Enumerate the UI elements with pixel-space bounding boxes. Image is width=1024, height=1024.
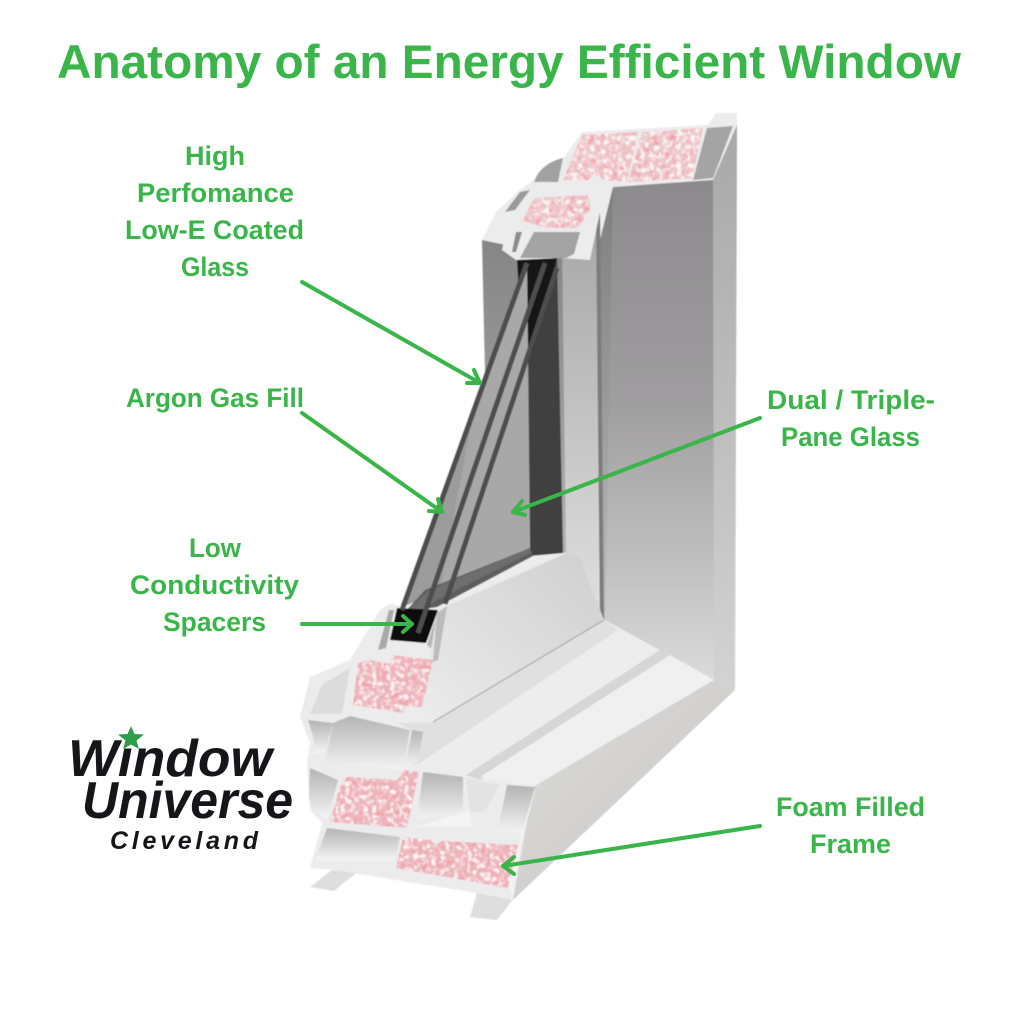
sash hollow: [520, 232, 575, 258]
sill cross-section hollows: [308, 655, 535, 920]
left jamb inner face: [482, 187, 613, 620]
sill outer side face: [513, 680, 735, 900]
label: foam filled frame: Foam Filled: [776, 792, 925, 822]
logo: Window Universe Cleveland: [68, 726, 293, 855]
left upper chamber: [310, 668, 350, 714]
channel grey: [466, 778, 500, 812]
hollow centre: [325, 716, 410, 770]
lower foam: [396, 837, 518, 888]
title: Anatomy of an Energy Efficient Window: [57, 35, 961, 88]
head foam left: [563, 132, 638, 182]
curved hollow: [309, 768, 338, 818]
label: low conductivity spacers: Spacers: [163, 607, 266, 637]
label: dual triple-pane glass: Pane Glass: [781, 422, 920, 452]
head foam right: [628, 128, 703, 182]
sill stepped surfaces: [397, 620, 618, 767]
label: high performance low-e coated glass: [125, 141, 304, 282]
logo: Window Universe Cleveland: Window: [68, 730, 276, 788]
logo: Window Universe Cleveland: Universe: [82, 772, 293, 830]
label: argon gas fill: Argon Gas Fill: [126, 383, 304, 413]
label: high performance low-e coated glass: Perfomance: [137, 178, 294, 208]
pane three: [445, 268, 557, 604]
head outline: [502, 113, 737, 260]
label: low conductivity spacers: Conductivity: [130, 570, 299, 600]
icon: green star: [118, 726, 144, 749]
low conductivity spacer: [390, 608, 438, 643]
pane one: [402, 263, 527, 610]
right jamb outer strip: [713, 125, 737, 690]
curved head hollow: [534, 158, 563, 182]
label: low conductivity spacers: Low: [189, 533, 241, 563]
right jamb face: [603, 179, 717, 680]
head cross-section: [502, 113, 737, 260]
triple glass panes: [402, 263, 557, 633]
label: high performance low-e coated glass: High: [185, 141, 245, 171]
label: dual triple-pane glass: [767, 385, 935, 452]
window cross-section illustration: [300, 113, 737, 920]
label: foam filled frame: Frame: [810, 829, 891, 859]
label: dual triple-pane glass: Dual / Triple-: [767, 385, 935, 415]
hollow narrow: [405, 730, 423, 767]
hollow left: [308, 720, 333, 753]
label: high performance low-e coated glass: Low-E Coated: [125, 215, 304, 245]
jamb and head frame silhouette: [300, 113, 737, 920]
head hollow right: [693, 126, 733, 180]
arrow: foam frame: [503, 826, 760, 874]
lower left hollow: [315, 828, 400, 860]
arrow: spacers: [302, 616, 412, 632]
arrow: triple-pane glass: [513, 418, 760, 515]
logo: Window Universe Cleveland: Cleveland: [110, 827, 259, 855]
arrow: low-e glass: [302, 282, 480, 383]
feet: [310, 870, 356, 891]
sash foam: [522, 195, 590, 228]
head shadow pocket: [512, 232, 522, 252]
sash lower channel: [375, 606, 447, 662]
right hollow: [417, 772, 463, 820]
middle foam: [330, 770, 419, 828]
label: high performance low-e coated glass: Glass: [181, 252, 249, 282]
sill rail face: [420, 553, 604, 722]
arrow: argon gas fill: [302, 413, 442, 512]
rear glass area: [402, 263, 530, 607]
pane two: [418, 263, 545, 633]
label: low conductivity spacers: [130, 533, 299, 637]
upper foam: [353, 655, 433, 713]
dark frame recess: [517, 257, 563, 556]
label: foam filled frame: [776, 792, 925, 859]
far right hollow: [498, 785, 535, 833]
lower step hollow: [417, 810, 472, 827]
